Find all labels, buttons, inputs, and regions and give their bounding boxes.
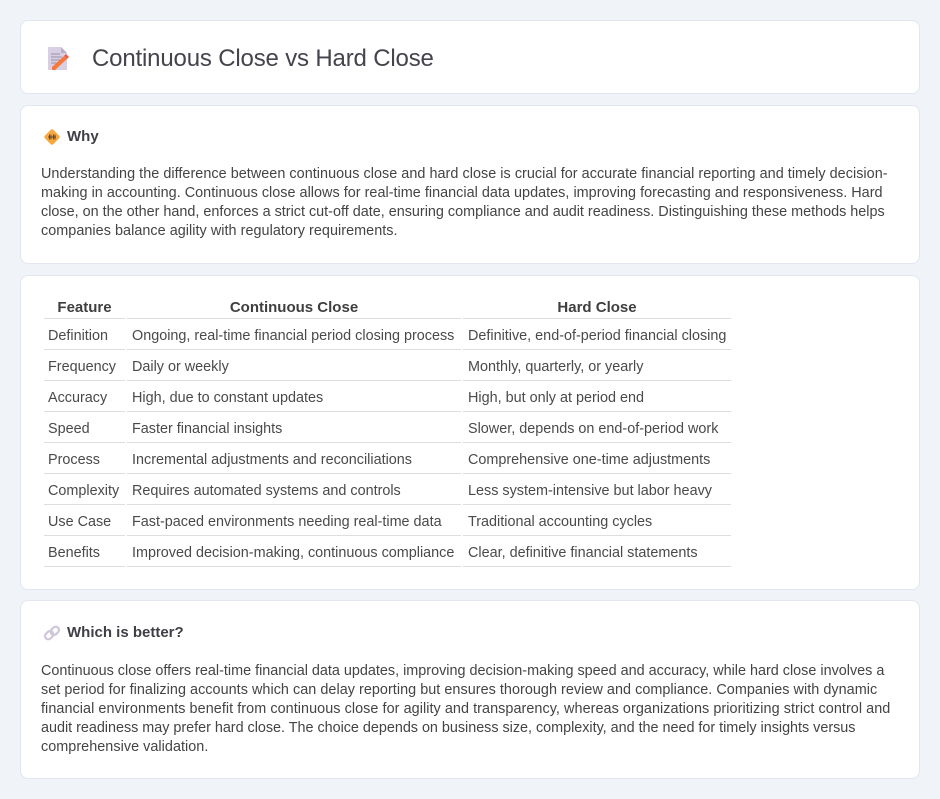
text: Speed xyxy=(48,421,90,437)
text block: which is better paragraph: audit readiness may prefer hard close. The choice depends on business size, complexity, and the need for timely insights versus xyxy=(41,720,855,736)
text: Incremental adjustments and reconciliations xyxy=(132,452,412,468)
icon: warning diamond xyxy=(44,129,60,145)
text block: why paragraph: Understanding the difference between continuous close and hard close is crucial for accurate financial reporting and timely decision- xyxy=(41,166,888,182)
text: Faster financial insights xyxy=(132,421,282,437)
text: Traditional accounting cycles xyxy=(468,514,652,530)
text: Monthly, quarterly, or yearly xyxy=(468,359,643,375)
text block: why paragraph: close, on the other hand, enforces a strict cut-off date, ensuring compliance and audit readiness. Distinguishing these methods helps xyxy=(41,204,885,220)
text: Process xyxy=(48,452,100,468)
text: Clear, definitive financial statements xyxy=(468,545,698,561)
icon: document with pencil xyxy=(48,47,69,70)
text: Definitive, end-of-period financial closing xyxy=(468,328,726,344)
text block: which is better paragraph xyxy=(41,663,890,755)
text: Slower, depends on end-of-period work xyxy=(468,421,718,437)
heading: which is better: Which is better? xyxy=(67,624,184,641)
text: Frequency xyxy=(48,359,116,375)
text block: which is better paragraph: set period for finalizing accounts which can delay reporting but ensures thorough review and compliance. Companies with dynamic xyxy=(41,682,877,698)
text: High, but only at period end xyxy=(468,390,644,406)
text block: which is better paragraph: financial environments benefit from continuous close for agility and transparency, whereas organizations prioritizing strict control and xyxy=(41,701,890,717)
text: Improved decision-making, continuous compliance xyxy=(132,545,454,561)
panel: why xyxy=(20,105,920,264)
table: comparison xyxy=(44,298,732,568)
icon: chain link xyxy=(44,626,60,640)
text block: which is better paragraph: comprehensive validation. xyxy=(41,739,208,755)
text: Use Case xyxy=(48,514,111,530)
text block: why paragraph: companies balance agility with regulatory requirements. xyxy=(41,223,398,239)
panel: which is better xyxy=(20,600,920,779)
panel: header xyxy=(20,20,920,94)
text: Requires automated systems and controls xyxy=(132,483,401,499)
text: Less system-intensive but labor heavy xyxy=(468,483,712,499)
text: Continuous Close xyxy=(230,299,358,316)
title: Continuous Close vs Hard Close xyxy=(92,45,434,72)
text: Daily or weekly xyxy=(132,359,229,375)
text block: why paragraph xyxy=(41,166,888,239)
text: Comprehensive one-time adjustments xyxy=(468,452,710,468)
text: Ongoing, real-time financial period closing process xyxy=(132,328,454,344)
text: Fast-paced environments needing real-time data xyxy=(132,514,442,530)
text: Definition xyxy=(48,328,108,344)
text: Benefits xyxy=(48,545,100,561)
text block: which is better paragraph: Continuous close offers real-time financial data updates, improving decision-making speed and accuracy, while hard close involves a xyxy=(41,663,884,679)
heading: why: Why xyxy=(67,128,99,145)
text: High, due to constant updates xyxy=(132,390,323,406)
text: Feature xyxy=(57,299,112,316)
text: Hard Close xyxy=(557,299,637,316)
panel: comparison table xyxy=(20,275,920,590)
text block: why paragraph: making in accounting. Continuous close allows for real-time financial data updates, improving forecasting and responsiveness. Hard xyxy=(41,185,883,201)
text: Complexity xyxy=(48,483,119,499)
text: Accuracy xyxy=(48,390,107,406)
